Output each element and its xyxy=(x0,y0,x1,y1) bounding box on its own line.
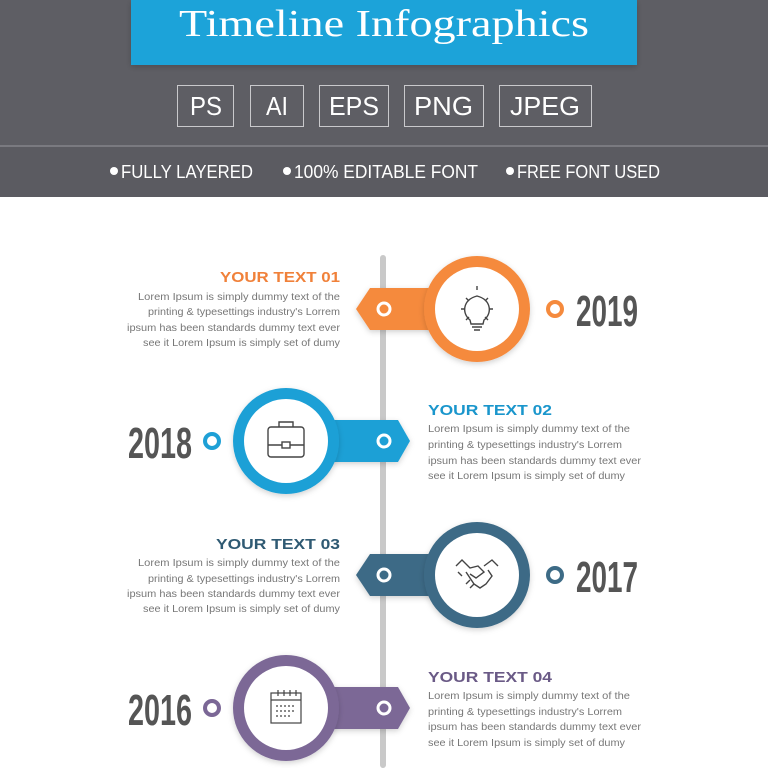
text block 04: see it Lorem Ipsum is simply set of dumy xyxy=(428,738,625,749)
text block 01: see it Lorem Ipsum is simply set of dumy xyxy=(143,338,340,349)
text block 02: printing & typesettings industry's Lorrem xyxy=(428,440,622,451)
icon: briefcase xyxy=(268,422,304,457)
feature bullets: 100% EDITABLE FONT xyxy=(294,162,478,182)
text block 03: see it Lorem Ipsum is simply set of dumy xyxy=(143,604,340,615)
format badges: AI xyxy=(266,91,288,121)
text block 01: printing & typesettings industry's Lorrem xyxy=(148,307,340,318)
title banner: Timeline Infographics xyxy=(179,3,589,45)
text block 02: YOUR TEXT 02 xyxy=(428,402,552,419)
format badges xyxy=(178,86,592,126)
step 1: 2019 xyxy=(356,256,638,362)
text block 02: Lorem Ipsum is simply dummy text of the xyxy=(428,424,630,435)
text block 03: printing & typesettings industry's Lorrem xyxy=(148,574,340,585)
text block 04 xyxy=(428,669,642,749)
icon: calendar xyxy=(271,690,301,723)
text block 01: Lorem Ipsum is simply dummy text of the xyxy=(138,292,340,303)
title banner xyxy=(131,0,637,65)
feature bullets xyxy=(110,162,660,182)
step 4: 2016 xyxy=(128,655,410,761)
feature bullets: FULLY LAYERED xyxy=(121,162,253,182)
header panel xyxy=(0,0,768,197)
text block 03 xyxy=(127,536,341,615)
text block 03: YOUR TEXT 03 xyxy=(216,536,340,553)
year 2018: 2018 xyxy=(128,419,192,468)
step 2: 2018 xyxy=(128,388,410,494)
text block 01: ipsum has been standards dummy text ever xyxy=(127,323,341,334)
text block 01: YOUR TEXT 01 xyxy=(220,269,340,286)
year 2019: 2019 xyxy=(576,287,638,336)
format badges: PS xyxy=(190,91,222,121)
format badges: EPS xyxy=(329,91,379,121)
text block 02 xyxy=(428,402,642,482)
icon: handshake xyxy=(456,560,498,588)
icon: light bulb xyxy=(461,286,493,330)
format badges: PNG xyxy=(414,91,473,121)
text block 03: Lorem Ipsum is simply dummy text of the xyxy=(138,558,340,569)
step 3: 2017 xyxy=(356,522,638,628)
text block 04: ipsum has been standards dummy text ever xyxy=(428,722,642,733)
text block 01 xyxy=(127,269,341,349)
year 2016: 2016 xyxy=(128,686,192,735)
format badges: JPEG xyxy=(510,91,580,121)
text block 02: ipsum has been standards dummy text ever xyxy=(428,456,642,467)
timeline line xyxy=(380,255,386,768)
feature bullets: FREE FONT USED xyxy=(517,162,660,182)
year 2017: 2017 xyxy=(576,553,638,602)
text block 04: YOUR TEXT 04 xyxy=(428,669,553,686)
text block 02: see it Lorem Ipsum is simply set of dumy xyxy=(428,471,625,482)
text block 04: printing & typesettings industry's Lorrem xyxy=(428,707,622,718)
text block 03: ipsum has been standards dummy text ever xyxy=(127,589,341,600)
text block 04: Lorem Ipsum is simply dummy text of the xyxy=(428,691,630,702)
